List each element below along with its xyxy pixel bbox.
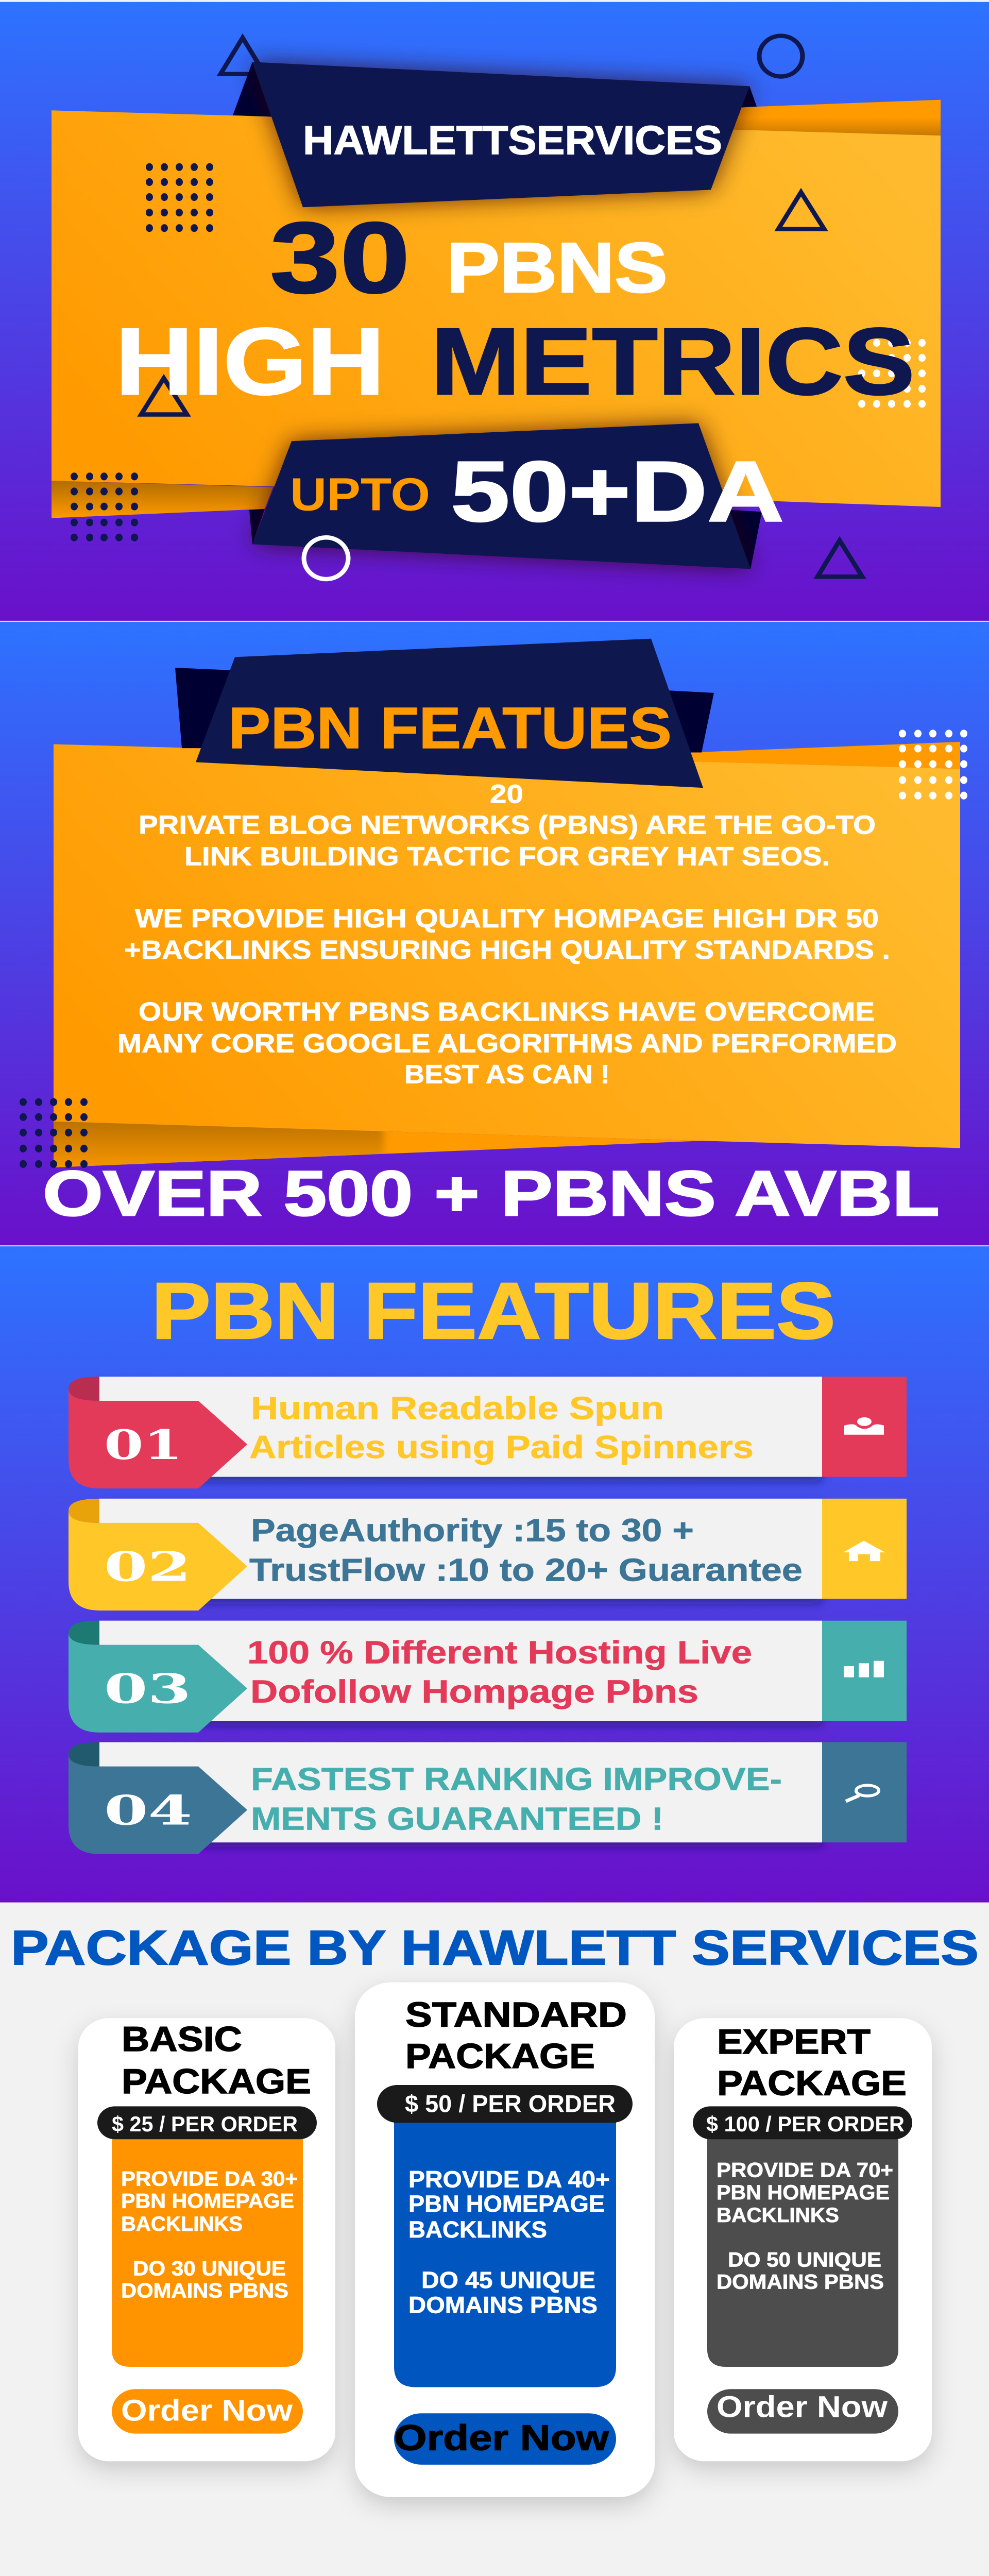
card: basic package: BACKLINKS: [121, 2212, 243, 2235]
dot pattern top right: [899, 730, 967, 800]
bottom left folded tab: [54, 1122, 702, 1167]
description text: 20: [490, 780, 523, 809]
card: basic package: PROVIDE DA 30+: [121, 2167, 298, 2190]
card: expert package: PBN HOMEPAGE: [717, 2181, 890, 2204]
panel: hero banner: [0, 2, 989, 621]
triangle outline top left: [220, 38, 265, 74]
section heading: PACKAGE BY HAWLETT SERVICES: [11, 1920, 979, 1975]
dot pattern bottom left: [20, 1098, 88, 1168]
card: standard package: DO 45 UNIQUE: [421, 2267, 595, 2293]
card: standard package: [355, 1982, 655, 2497]
card: standard package: BACKLINKS: [408, 2216, 547, 2243]
card: basic package: [78, 2018, 335, 2461]
feature row 02: TrustFlow :10 to 20+ Guarantee: [249, 1552, 803, 1588]
HIGH headline: HIGH: [115, 309, 385, 415]
orange paper sheet: [54, 744, 960, 1148]
METRICS headline: METRICS: [431, 309, 915, 415]
top right folded tab: [721, 100, 941, 135]
feature row 01: [69, 1377, 907, 1488]
feature row 03: 03: [104, 1665, 191, 1713]
bottom left folded tab: [52, 481, 273, 518]
feature row 03: [69, 1621, 907, 1733]
availability headline: OVER 500 + PBNS AVBL: [43, 1158, 940, 1229]
feature row 01: Human Readable Spun: [251, 1391, 664, 1426]
card: basic package: BASIC: [122, 2020, 242, 2059]
feature row 01: Articles using Paid Spinners: [249, 1429, 754, 1465]
card: expert package: [674, 2018, 932, 2461]
description text: [117, 780, 897, 1089]
feature row 03: 100 % Different Hosting Live: [247, 1634, 752, 1670]
circle outline top right: [759, 36, 803, 76]
dot pattern bottom left: [71, 472, 138, 541]
panel: PBN description: [0, 622, 989, 1245]
card: standard package: DOMAINS PBNS: [408, 2292, 598, 2318]
dark banner folds: [175, 668, 714, 753]
description text: PRIVATE BLOG NETWORKS (PBNS) ARE THE GO-TO: [139, 811, 876, 840]
brand name: HAWLETTSERVICES: [303, 117, 722, 163]
top right folded tab: [691, 742, 960, 769]
orange paper sheet: [52, 110, 941, 507]
feature row 02: 02: [104, 1543, 191, 1591]
UPTO label: UPTO: [290, 468, 430, 520]
number 30: 30: [270, 201, 410, 314]
description text: WE PROVIDE HIGH QUALITY HOMPAGE HIGH DR 50: [135, 904, 879, 933]
feature row 03: Dofollow Hompage Pbns: [250, 1673, 698, 1709]
bottom navy banner: [252, 423, 751, 569]
card: expert package: PROVIDE DA 70+: [717, 2159, 893, 2181]
white circle outline: [304, 537, 348, 579]
banner title: PBN FEATUES: [228, 696, 672, 760]
feature row 02: [69, 1499, 907, 1611]
icon: user: [844, 1417, 884, 1435]
panel: packages: [0, 1903, 989, 2576]
panel: PBN features list: [0, 1246, 989, 1903]
top navy banner: [252, 62, 749, 207]
card: basic package: PACKAGE: [122, 2062, 311, 2100]
card: standard package: STANDARD: [405, 1995, 627, 2034]
section gradient background: [0, 622, 989, 1245]
card: expert package: PACKAGE: [717, 2064, 907, 2103]
card: expert package: DOMAINS PBNS: [717, 2270, 884, 2293]
feature row 04: 04: [104, 1787, 192, 1835]
card: standard package: PACKAGE: [405, 2037, 595, 2076]
hero gradient background: [0, 2, 989, 621]
card: standard package: PBN HOMEPAGE: [408, 2191, 605, 2217]
description text: LINK BUILDING TACTIC FOR GREY HAT SEOS.: [184, 842, 830, 871]
card: standard package: PROVIDE DA 40+: [408, 2166, 610, 2192]
top banner dark folds: [233, 62, 757, 117]
feature row 02: PageAuthority :15 to 30 +: [251, 1512, 694, 1548]
feature row 04: [69, 1742, 907, 1854]
navy banner: [196, 639, 703, 788]
description text: BEST AS CAN !: [404, 1060, 610, 1089]
triangle outline left: [141, 378, 187, 415]
card: expert package: DO 50 UNIQUE: [728, 2248, 881, 2271]
card: basic package: DO 30 UNIQUE: [133, 2257, 286, 2280]
card: standard package: $ 50 / PER ORDER: [405, 2091, 616, 2117]
card: expert package: BACKLINKS: [717, 2204, 839, 2227]
feature row 01: 01: [104, 1421, 183, 1469]
triangle outline right: [778, 192, 824, 229]
dot pattern right: [858, 339, 926, 408]
feature row 04: MENTS GUARANTEED !: [251, 1801, 663, 1837]
card: standard package: Order Now: [394, 2418, 609, 2458]
tab shadow: [54, 1121, 387, 1167]
card: expert package: EXPERT: [717, 2022, 871, 2061]
triangle outline bottom right: [817, 540, 862, 577]
description text: MANY CORE GOOGLE ALGORITHMS AND PERFORMED: [117, 1029, 897, 1058]
icon: bars: [844, 1661, 884, 1677]
section gradient background: [0, 1246, 989, 1903]
card: basic package: DOMAINS PBNS: [121, 2279, 288, 2302]
section background: [0, 1903, 989, 2576]
bottom banner dark folds: [249, 509, 762, 569]
section heading: PBN FEATURES: [151, 1266, 835, 1355]
card: basic package: $ 25 / PER ORDER: [112, 2112, 298, 2137]
feature row 04: FASTEST RANKING IMPROVE-: [251, 1761, 782, 1797]
card: expert package: $ 100 / PER ORDER: [706, 2112, 905, 2137]
card: expert package: Order Now: [717, 2390, 888, 2424]
50+DA headline: 50+DA: [451, 444, 784, 539]
icon: house: [843, 1541, 885, 1561]
description text: OUR WORTHY PBNS BACKLINKS HAVE OVERCOME: [139, 998, 875, 1027]
dot pattern top left: [146, 163, 213, 232]
card: basic package: Order Now: [121, 2394, 293, 2427]
icon: magnifier: [846, 1785, 879, 1801]
card: basic package: PBN HOMEPAGE: [121, 2190, 294, 2212]
PBNS label: PBNS: [447, 229, 668, 308]
description text: +BACKLINKS ENSURING HIGH QUALITY STANDARDS .: [124, 936, 890, 965]
